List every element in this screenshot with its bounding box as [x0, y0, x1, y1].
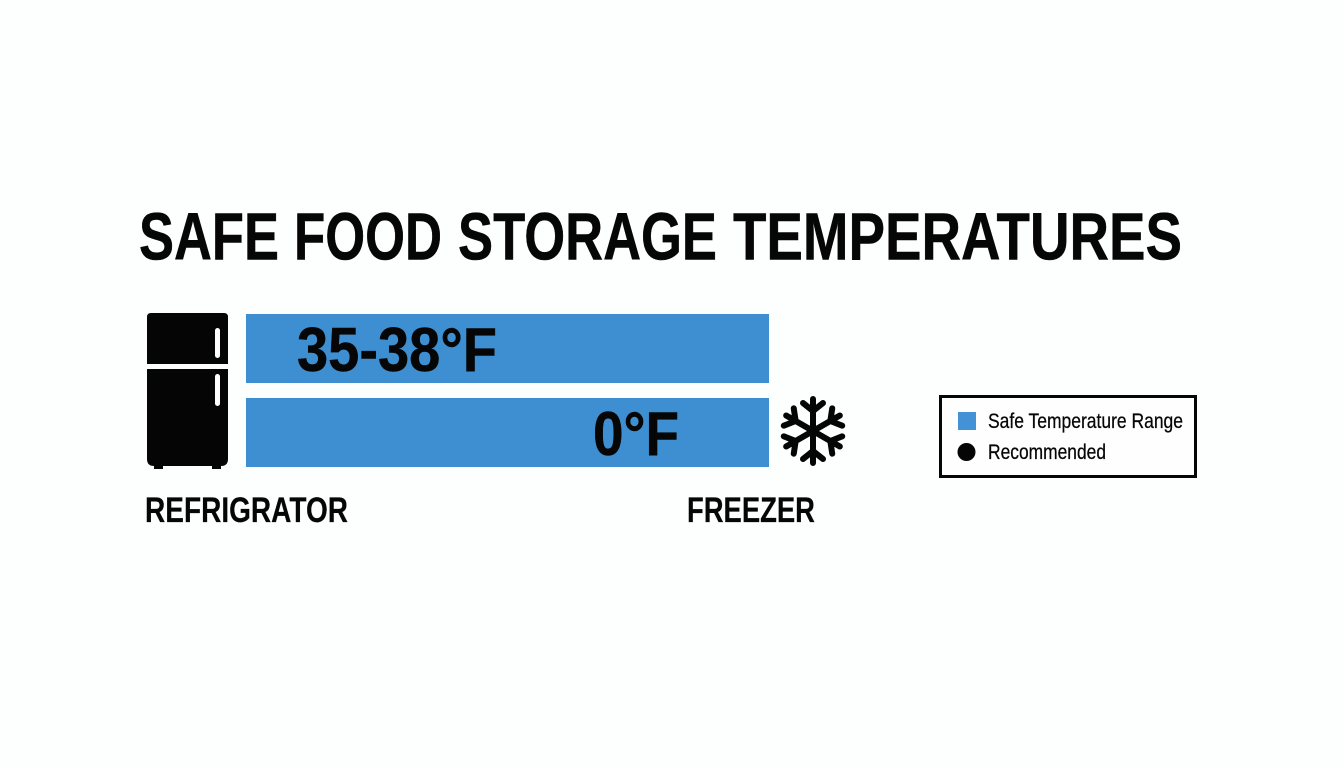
title: SAFE [139, 200, 279, 274]
legend marker: recommended [958, 443, 976, 461]
icon: snowflake [781, 399, 845, 463]
label: refrigerator: REFRIGRATOR [145, 491, 348, 530]
title [139, 200, 1182, 274]
legend text: safe range: Safe Temperature Range [988, 410, 1183, 433]
icon: refrigerator [147, 313, 228, 469]
label: freezer: FREEZER [687, 491, 815, 530]
legend swatch: safe range [958, 412, 976, 430]
freezer temperature value: 0°F [593, 400, 679, 469]
legend [940, 396, 1196, 476]
legend text: recommended: Recommended [988, 441, 1106, 464]
bar: freezer range [246, 398, 769, 469]
title: TEMPERATURES [733, 200, 1182, 274]
bar: refrigerator range [246, 314, 769, 385]
title: STORAGE [458, 200, 717, 274]
refrigerator temperature value: 35-38°F [297, 316, 497, 385]
title: FOOD [294, 200, 442, 274]
